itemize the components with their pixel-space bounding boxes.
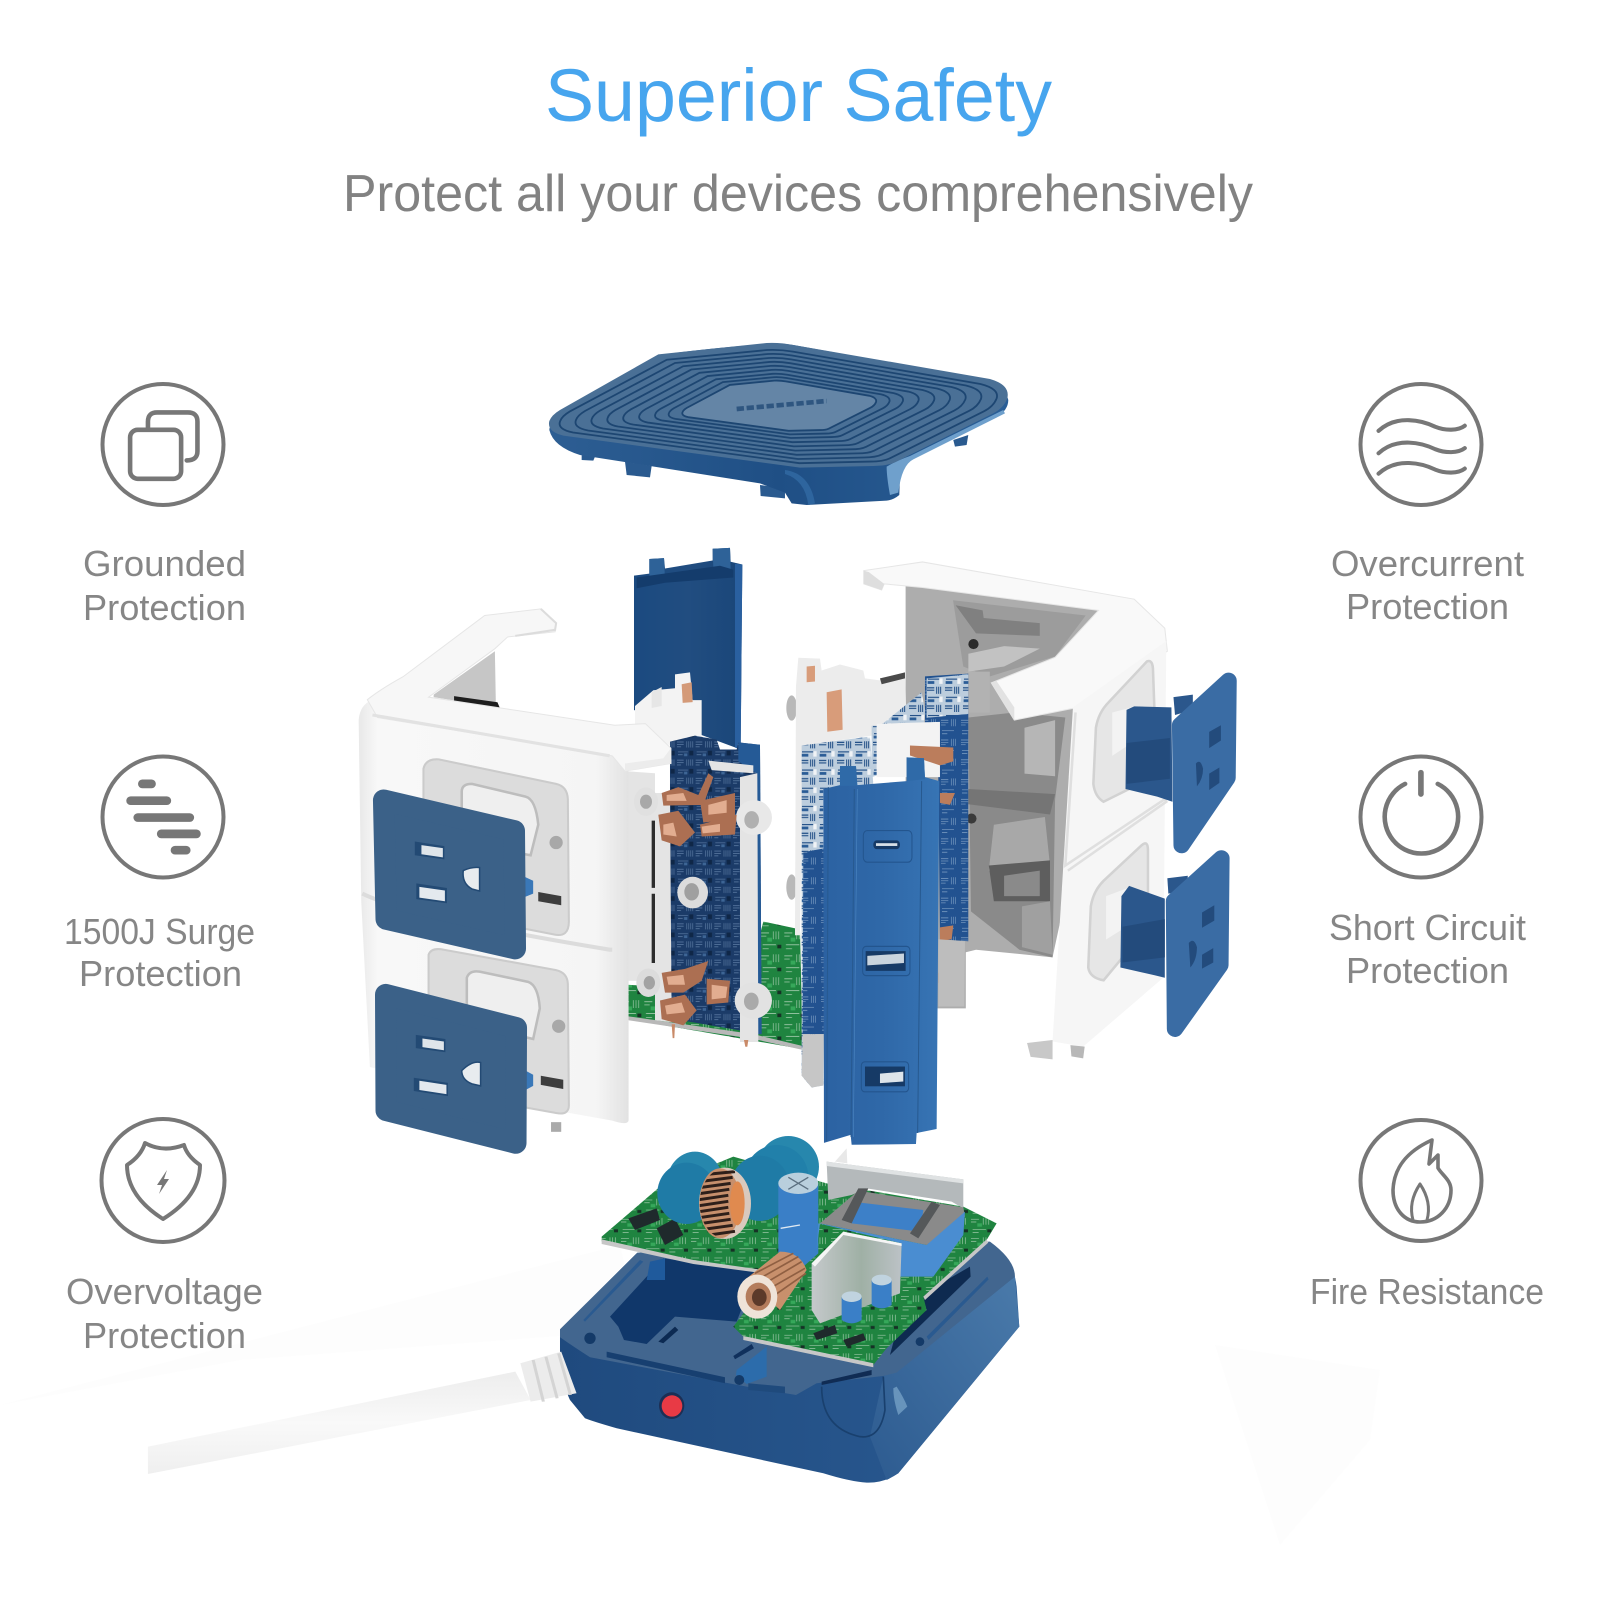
port: USB-A lower [861, 1062, 909, 1092]
top lid [549, 343, 1008, 505]
blue capacitor discs [657, 1136, 819, 1224]
left circuit board with white frame and copper contacts [627, 672, 772, 1047]
feature: overvoltage protection: Overvoltage [66, 1271, 263, 1312]
left white housing with blue outlet plates [359, 609, 671, 1143]
far right board [925, 674, 968, 941]
feature: overcurrent protection: Protection [1346, 586, 1509, 627]
port: USB-C [863, 831, 912, 862]
lower outlet plate [386, 995, 533, 1143]
rear dark blue USB panel [634, 548, 742, 750]
port: USB-A upper [863, 946, 910, 976]
feature: grounded protection [83, 384, 246, 628]
subtitle: Protect all your devices comprehensively [343, 165, 1253, 223]
feature: 1500J surge protection: Protection [79, 953, 242, 994]
body [359, 700, 629, 1123]
toroid coil [699, 1168, 751, 1239]
feature: 1500J surge protection [64, 756, 255, 994]
center back board and white divider [786, 658, 968, 1087]
feature: overvoltage protection: Protection [83, 1315, 246, 1356]
electrolytic capacitor [778, 1173, 818, 1267]
feature: overcurrent protection: Overcurrent [1331, 543, 1524, 584]
title: Superior Safety [545, 54, 1052, 137]
right outlet plates with blue plug blocks [1120, 681, 1229, 1029]
feature: short circuit protection [1329, 756, 1526, 991]
white corner rim [864, 562, 1167, 720]
feature: grounded protection: Protection [83, 587, 246, 628]
feature: 1500J surge protection: 1500J Surge [64, 911, 255, 952]
background light sheen [0, 1245, 1380, 1545]
green lower circuit board [627, 921, 803, 1050]
feature: grounded protection: Grounded [83, 543, 246, 584]
feature: overcurrent protection [1331, 384, 1524, 627]
feature: fire resistance: Fire Resistance [1310, 1271, 1544, 1312]
LED indicator [659, 1392, 684, 1419]
base body [560, 1242, 1019, 1483]
top rim [367, 609, 671, 771]
feature: short circuit protection: Short Circuit [1329, 907, 1526, 948]
metal shield and small capacitors [812, 1232, 902, 1323]
feature: short circuit protection: Protection [1346, 950, 1509, 991]
upper recess [423, 759, 569, 935]
white right face [1053, 641, 1166, 1047]
power cord with strain relief [148, 1352, 577, 1474]
right white housing with grey interior [864, 562, 1167, 1059]
upper outlet plate [384, 800, 533, 949]
lower recess [429, 949, 569, 1113]
feature: fire resistance [1310, 1120, 1544, 1312]
base unit with circuit boards and LED [560, 1136, 1019, 1483]
lower right outlet [1120, 858, 1221, 1029]
upper right outlet [1126, 681, 1229, 845]
transformer [817, 1148, 965, 1277]
copper inductor [737, 1252, 807, 1319]
opening [610, 1258, 757, 1344]
feature: overvoltage protection [66, 1119, 263, 1356]
front blue USB panel with ports [823, 757, 939, 1145]
main PCB [602, 1157, 997, 1365]
